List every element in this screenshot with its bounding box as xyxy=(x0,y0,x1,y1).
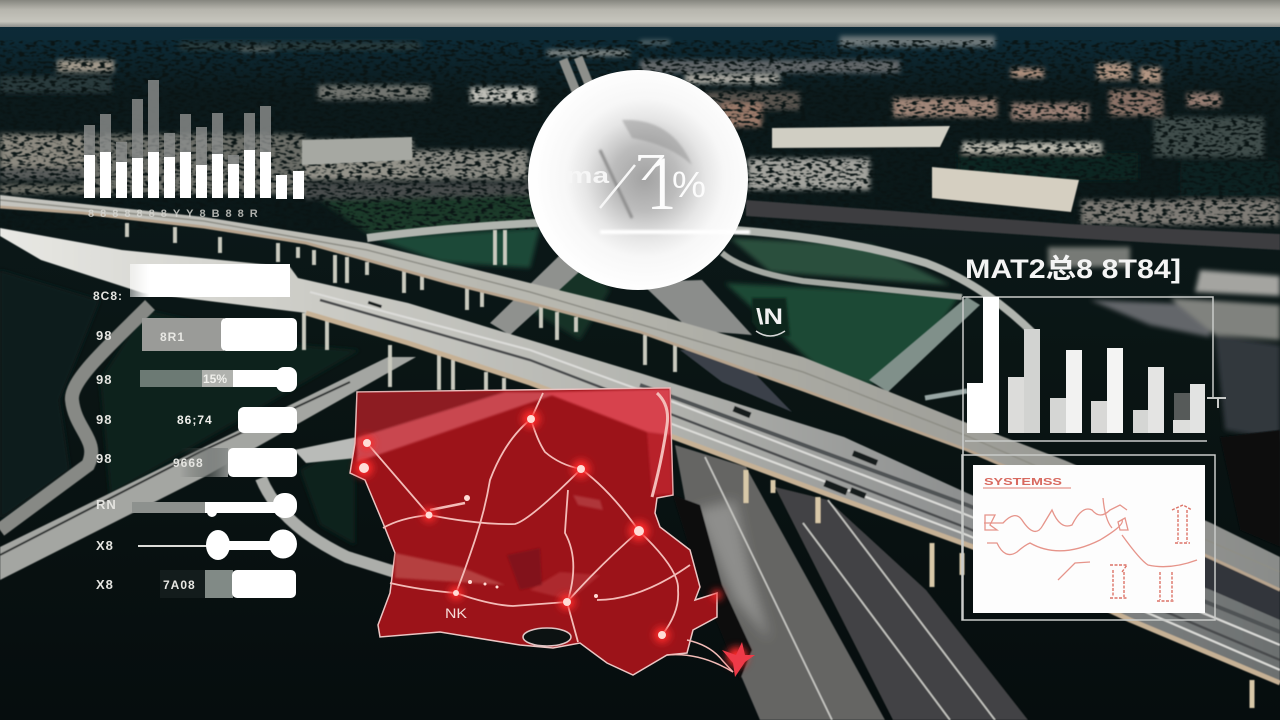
row 3: 98 xyxy=(96,412,112,427)
distant frontage road xyxy=(746,200,1280,250)
red line curves xyxy=(984,498,1197,580)
row 7 xyxy=(96,570,296,598)
row 2 xyxy=(96,367,297,392)
row 3 xyxy=(96,407,297,433)
heading: MAT2总8 8T84] xyxy=(965,254,1181,284)
row 3: 86;74 xyxy=(177,413,213,427)
row 2: 15% xyxy=(203,372,227,386)
row 5 xyxy=(96,493,297,518)
panel: left horizontal bars xyxy=(93,264,297,598)
state shape xyxy=(350,388,717,675)
frame: lower chart xyxy=(962,455,1215,620)
road network xyxy=(367,393,733,672)
bar chart axis labels: 8888888YY8B88R xyxy=(88,208,264,220)
row 0: wide header bar xyxy=(93,264,290,303)
red arrow glyphs xyxy=(1110,505,1192,601)
diagonal divider xyxy=(600,165,635,208)
delta tip marker xyxy=(722,642,755,677)
row 7: 7A08 xyxy=(163,578,196,592)
row 1: 98 xyxy=(96,328,112,343)
cars xyxy=(368,301,1014,514)
city speckle texture xyxy=(0,40,1280,230)
panel: right column charts xyxy=(962,254,1226,620)
row 0: wide header bar: 8C8: xyxy=(93,289,123,303)
map label: NK xyxy=(445,605,468,621)
lake xyxy=(523,628,571,646)
thin ramps xyxy=(367,223,1035,335)
right-hand lane block xyxy=(1064,490,1280,625)
upper highway xyxy=(0,195,1280,590)
bar chart xyxy=(967,297,1205,433)
lower highway xyxy=(0,228,1280,683)
ground roads xyxy=(0,255,1280,720)
panel: circular percentage gauge xyxy=(528,70,750,290)
row 6 xyxy=(96,530,297,560)
row 4: 9668 xyxy=(173,456,204,470)
glowing network nodes xyxy=(355,410,747,667)
row 6: X8 xyxy=(96,538,114,553)
gauge label: ma xyxy=(566,163,610,188)
chart title: SYSTEMSS xyxy=(984,477,1062,488)
panel: top-left bar chart xyxy=(84,80,304,220)
row 4: 98 xyxy=(96,451,112,466)
gauge value: 1 xyxy=(647,142,676,226)
row 7: X8 xyxy=(96,577,114,592)
frame: upper chart xyxy=(963,297,1226,620)
gauge value xyxy=(634,142,706,226)
warehouse roofs xyxy=(302,56,1079,212)
row 4 xyxy=(96,448,297,477)
icon: compass marker xyxy=(752,298,790,338)
row 1: 8R1 xyxy=(160,330,185,344)
icon: compass marker: \N xyxy=(756,304,783,329)
panel: white line chart xyxy=(973,465,1205,613)
row 5: RN xyxy=(96,497,117,512)
piers xyxy=(127,223,675,427)
row 1 xyxy=(96,318,297,351)
gauge value: 7 xyxy=(634,147,666,189)
row 2: 98 xyxy=(96,372,112,387)
map: red state with network xyxy=(350,388,755,677)
gauge value: % xyxy=(672,164,706,205)
